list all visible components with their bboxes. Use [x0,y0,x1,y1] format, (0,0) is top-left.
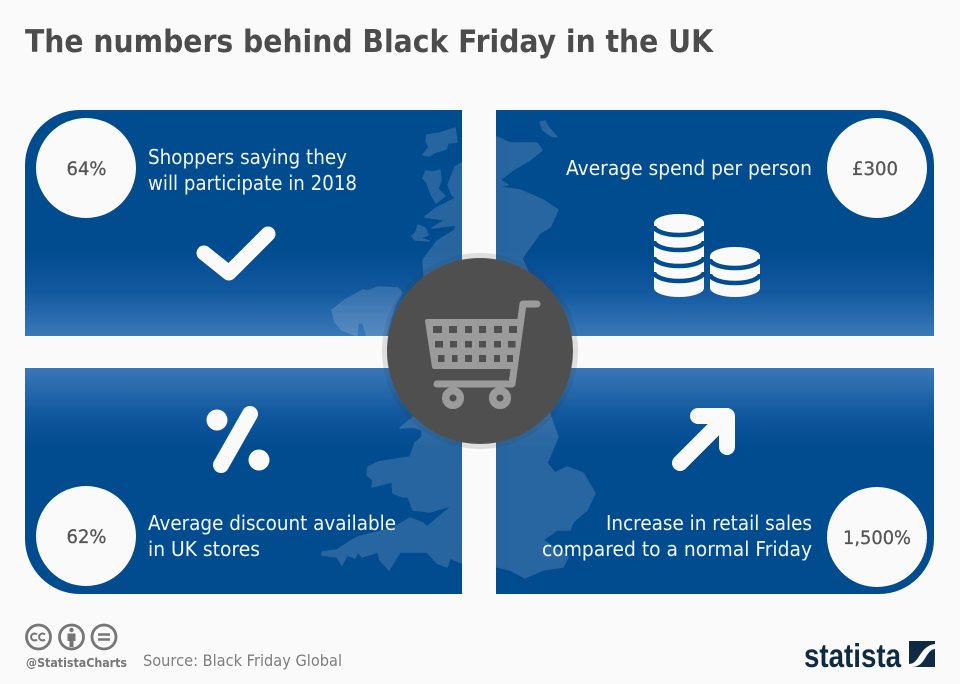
icon: statista mark [909,641,935,667]
circle: 1,500% [827,487,927,587]
circle: £300 [827,118,927,218]
text: average discount: Average discount available [148,511,396,535]
panel: average spend [496,110,934,336]
title: The numbers behind Black Friday in the UK [25,24,714,60]
map: United Kingdom [322,121,595,578]
icon: coins [654,214,760,297]
icon: creative commons licence [26,625,116,649]
logo: statista: statista [804,637,902,674]
text: shoppers: Shoppers saying they [148,145,347,169]
text: retail sales [542,511,812,561]
circle: 64%: 64% [66,158,106,180]
text: retail sales: Increase in retail sales [606,511,812,535]
circle: 62% [36,486,136,586]
central badge with cart [382,253,578,449]
text: shoppers: will participate in 2018 [148,171,357,195]
circle: 62%: 62% [66,526,106,548]
icon: upward arrow [680,416,727,463]
text: average discount [148,511,396,561]
text: shoppers [148,145,357,195]
panel: retail sales increase [496,368,934,594]
panel: shoppers participating [25,110,462,336]
circle: £300: £300 [852,158,898,180]
icon: shopping cart [427,304,537,405]
circle: 1,500%: 1,500% [843,527,911,549]
circle: 64% [36,118,136,218]
icon: check mark [204,234,268,273]
icon: percent sign [206,410,270,470]
text: average discount: in UK stores [148,537,260,561]
text: source: Source: Black Friday Global [143,651,342,670]
panel: average discount [25,368,462,594]
text: average spend: Average spend per person [566,156,812,180]
text: retail sales: compared to a normal Friday [542,537,812,561]
text: handle: @StatistaCharts [26,656,127,670]
